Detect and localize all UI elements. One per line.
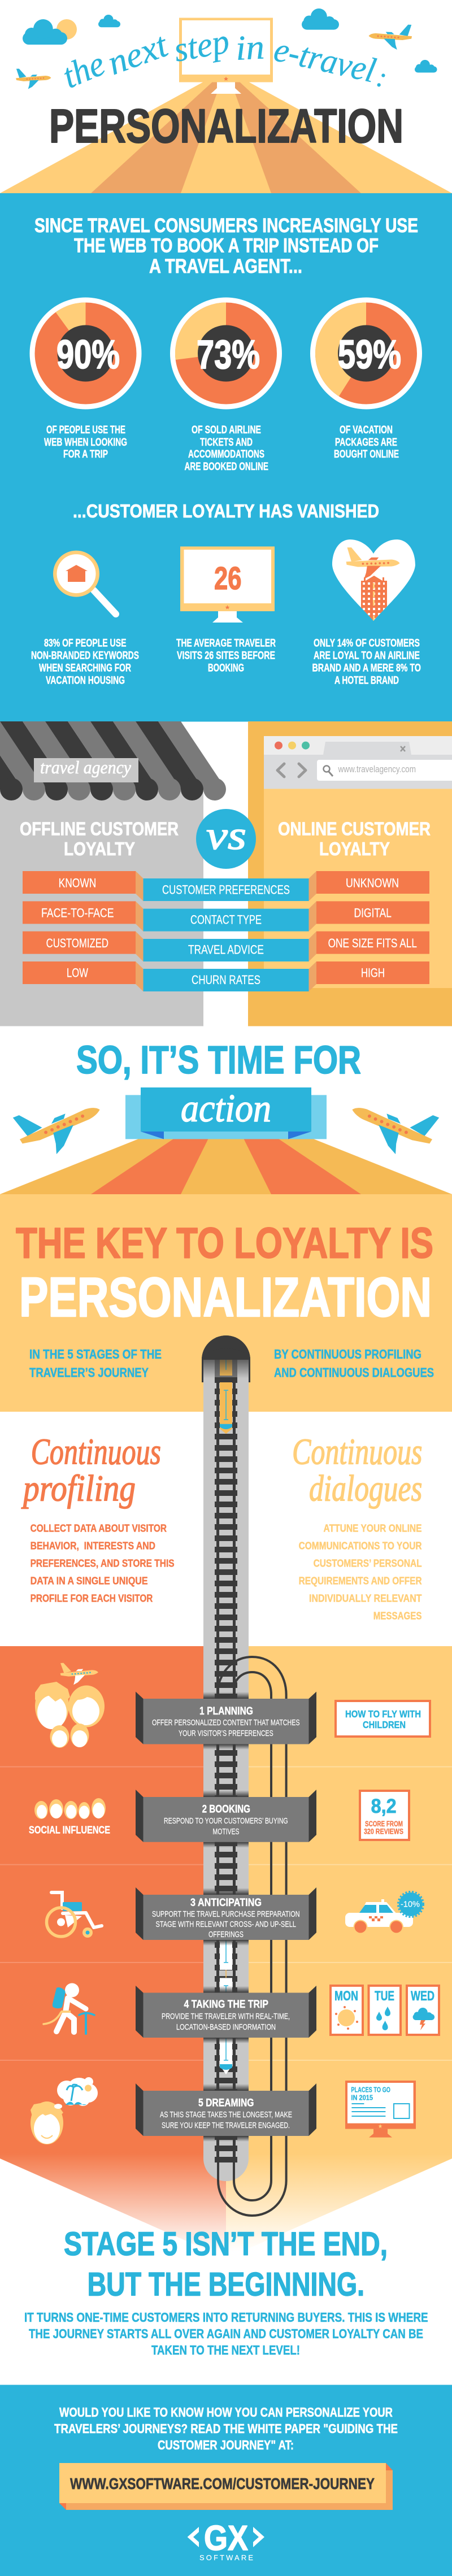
caption: 73% — [184, 424, 268, 473]
caption: keywords: 83% OF PEOPLE USE — [44, 638, 127, 650]
icon: dreaming head with thought bubble — [31, 2077, 98, 2144]
stage 1: planning: YOUR VISITOR’S PREFERENCES — [179, 1729, 273, 1738]
title: script line — [57, 22, 390, 96]
stage 3: anticipating: STAGE WITH RELEVANT CROSS- AND UP-SELL — [156, 1920, 296, 1929]
stage 2: booking: MOTIVES — [212, 1827, 240, 1837]
caption: keywords: VACATION HOUSING — [46, 675, 125, 686]
address bar: www.travelagency.com — [338, 764, 416, 774]
card: review score — [360, 1791, 409, 1840]
panel: offline store — [0, 721, 226, 1026]
panel: continuous dialogues — [292, 1431, 423, 1622]
text: five stages — [29, 1347, 162, 1380]
text: collect data: PREFERENCES, AND STORE THIS — [31, 1557, 175, 1569]
panel: time for action — [0, 1038, 452, 1194]
icon: right plane — [368, 23, 412, 50]
text: collect data — [31, 1522, 175, 1604]
panel: statistics on blue — [0, 193, 452, 722]
chart: 90% donut: 90% — [56, 333, 120, 377]
row: customer preferences: UNKNOWN — [346, 876, 399, 890]
row: travel advice — [23, 932, 429, 961]
heading: continuous dialogues: dialogues — [309, 1468, 423, 1509]
label: social influence: SOCIAL INFLUENCE — [29, 1825, 110, 1836]
chart: 73% donut — [170, 297, 282, 409]
row: customer preferences — [23, 871, 429, 901]
stage 3: anticipating: 3 ANTICIPATING — [190, 1897, 262, 1909]
heading: so it's time for: SO, IT’S TIME FOR — [76, 1038, 361, 1082]
text: collect data: BEHAVIOR, INTERESTS AND — [31, 1540, 155, 1552]
caption: 26 sites — [176, 638, 276, 675]
caption: 59%: BOUGHT ONLINE — [334, 449, 399, 460]
icon: left plane — [16, 68, 51, 89]
icon: monitor places to go: IN 2015 — [351, 2094, 373, 2101]
caption: keywords — [31, 638, 139, 686]
panel: continuous profiling — [21, 1431, 175, 1604]
tunnel entrance — [202, 1335, 250, 1382]
heading: offline customer loyalty — [20, 819, 179, 860]
ribbon: action: action — [181, 1087, 271, 1130]
icon: sun behind cloud — [56, 19, 77, 40]
card: how to fly with children — [336, 1701, 430, 1737]
heading: online customer loyalty — [278, 819, 431, 860]
ribbon: action — [125, 1087, 327, 1139]
heading: online customer loyalty: LOYALTY — [319, 839, 390, 860]
panel: online browser — [248, 721, 452, 1026]
text: collect data: COLLECT DATA ABOUT VISITOR — [31, 1522, 167, 1534]
panel: key to loyalty — [0, 1194, 452, 1412]
icon: social influence faces — [34, 1798, 106, 1819]
icon: monitor places to go — [345, 2081, 416, 2138]
caption: 59% — [334, 424, 399, 460]
heading: since travel consumers — [34, 215, 418, 277]
panel: page hero — [0, 8, 452, 193]
icon: right plane — [343, 1086, 441, 1165]
card: monday sunny — [331, 1986, 363, 2035]
light rays from monitor — [0, 82, 452, 193]
text: returning buyers — [24, 2310, 428, 2357]
sign: travel agency: travel agency — [40, 757, 132, 777]
badge: minus 10 percent: -10% — [401, 1900, 420, 1909]
text: five stages: IN THE 5 STAGES OF THE — [29, 1347, 162, 1361]
stage 3: anticipating: OFFERINGS — [208, 1930, 244, 1939]
icon: browser window controls — [275, 742, 411, 777]
heading: continuous profiling: profiling — [21, 1468, 136, 1509]
text: five stages: TRAVELER’S JOURNEY — [29, 1365, 149, 1380]
callout: url box: WWW.GXSOFTWARE.COM/CUSTOMER-JOURNEY — [70, 2475, 375, 2492]
caption: 73%: ACCOMMODATIONS — [188, 449, 264, 460]
card: review score: 8,2 — [371, 1795, 397, 1817]
caption: 26 sites: VISITS 26 SITES BEFORE — [177, 650, 275, 662]
icon: hiker — [44, 1983, 94, 2034]
text: continuous profiling and dialogues — [274, 1347, 434, 1380]
stage 1: planning — [136, 1691, 316, 1750]
row: contact type — [23, 901, 429, 932]
text: attune communications: MESSAGES — [373, 1610, 421, 1622]
row: travel advice: TRAVEL ADVICE — [188, 943, 264, 957]
light rays under ribbon — [0, 1132, 452, 1194]
heading: offline customer loyalty: OFFLINE CUSTOMER — [20, 819, 179, 840]
row: contact type: FACE-TO-FACE — [41, 906, 114, 920]
caption: 90% — [44, 424, 127, 460]
caption: 90%: FOR A TRIP — [63, 449, 108, 460]
caption: brand loyalty — [312, 638, 421, 686]
title: script line: : — [373, 60, 390, 94]
badge: vs: vs — [206, 813, 246, 858]
text: white paper invitation — [54, 2405, 398, 2452]
heading: customer loyalty has vanished: ...CUSTOMER LOYALTY HAS VANISHED — [73, 501, 379, 521]
card: monday sunny: MON — [334, 1988, 358, 2004]
stage 2: booking: RESPOND TO YOUR CUSTOMERS’ BUYING — [164, 1816, 288, 1826]
stage 4: taking the trip — [136, 1986, 316, 2043]
icon: striped awning — [0, 721, 226, 800]
heading: continuous profiling — [21, 1431, 161, 1509]
title: script line: next — [103, 25, 173, 82]
heading: stage 5 isn't the end: STAGE 5 ISN’T THE END, — [64, 2226, 388, 2262]
stage 5: dreaming: AS THIS STAGE TAKES THE LONGEST, MAKE — [160, 2110, 292, 2120]
text: attune communications: CUSTOMERS’ PERSONAL — [314, 1557, 422, 1569]
row: churn rates: CHURN RATES — [192, 973, 260, 987]
icon: heart with plane and hotel — [332, 539, 415, 621]
caption: 73%: ARE BOOKED ONLINE — [184, 461, 268, 473]
text: white paper invitation: CUSTOMER JOURNEY" AT: — [158, 2438, 294, 2452]
train: yellow — [220, 1353, 232, 1434]
stage 3: anticipating: SUPPORT THE TRAVEL PURCHASE PREPARATION — [152, 1909, 300, 1919]
train: white — [220, 1940, 232, 2074]
caption: 73%: OF SOLD AIRLINE — [192, 424, 261, 436]
caption: keywords: WHEN SEARCHING FOR — [39, 663, 131, 675]
chart: 59% donut — [310, 297, 422, 409]
heading: since travel consumers: THE WEB TO BOOK A TRIP INSTEAD OF — [74, 235, 379, 256]
caption: 90%: OF PEOPLE USE THE — [46, 424, 125, 436]
stage 5: dreaming: 5 DREAMING — [198, 2098, 254, 2109]
row: churn rates: LOW — [67, 966, 89, 980]
heading: continuous dialogues — [292, 1431, 423, 1509]
caption: keywords: NON-BRANDED KEYWORDS — [31, 650, 139, 662]
row: contact type: CONTACT TYPE — [190, 913, 262, 927]
panel: offline versus online — [0, 721, 452, 1026]
panel: footer call to action — [0, 2385, 452, 2576]
heading: since travel consumers: A TRAVEL AGENT... — [149, 255, 302, 277]
panel: journey stages background — [0, 1646, 452, 2259]
card: review score: SCORE FROM — [365, 1820, 403, 1828]
row: travel advice: ONE SIZE FITS ALL — [328, 936, 417, 950]
callout: url box — [59, 2463, 393, 2510]
icon: monitor with 26 — [180, 546, 275, 623]
heading: offline customer loyalty: LOYALTY — [64, 839, 135, 860]
chart: 73% donut: 73% — [197, 333, 260, 377]
stage 1: planning: 1 PLANNING — [199, 1705, 253, 1717]
icon: desktop monitor — [179, 18, 273, 94]
icon: left plane — [11, 1086, 109, 1165]
row: churn rates: HIGH — [361, 966, 385, 980]
stage 5: dreaming: SURE YOU KEEP THE TRAVELER ENGAGED. — [162, 2121, 290, 2130]
railway track — [202, 1335, 286, 2216]
address bar — [317, 760, 452, 781]
caption: 59%: OF VACATION — [340, 424, 393, 436]
stage 3: anticipating — [136, 1887, 316, 1946]
text: continuous profiling and dialogues: BY CONTINUOUS PROFILING — [274, 1347, 421, 1361]
stage 2: booking: 2 BOOKING — [202, 1804, 250, 1816]
stage 2: booking — [136, 1790, 316, 1848]
text: collect data: DATA IN A SINGLE UNIQUE — [31, 1575, 148, 1587]
heading: stage 5 isn't the end — [64, 2226, 388, 2303]
chart: 59% donut: 59% — [338, 333, 401, 377]
title: script line: in — [234, 28, 266, 68]
card: wednesday storm — [407, 1986, 439, 2035]
icon: clouds — [23, 8, 437, 73]
caption: brand loyalty: ARE LOYAL TO AN AIRLINE — [314, 650, 420, 662]
card: tuesday rain — [368, 1986, 401, 2035]
caption: 90%: WEB WHEN LOOKING — [44, 437, 127, 449]
caption: brand loyalty: ONLY 14% OF CUSTOMERS — [314, 638, 420, 650]
stage 4: taking the trip: LOCATION-BASED INFORMATION — [176, 2022, 276, 2032]
icon: monitor places to go: PLACES TO GO — [351, 2086, 390, 2094]
badge: vs — [196, 809, 256, 869]
card: how to fly with children: HOW TO FLY WITH — [345, 1708, 421, 1720]
text: returning buyers: TAKEN TO THE NEXT LEVEL! — [151, 2343, 300, 2357]
card: review score: 320 REVIEWS — [364, 1827, 403, 1835]
logo: gx software — [188, 2519, 264, 2562]
icon: family with plane — [35, 1661, 105, 1748]
icon: magnifying glass with house — [53, 551, 116, 614]
caption: 59%: PACKAGES ARE — [335, 437, 397, 449]
stage 4: taking the trip: 4 TAKING THE TRIP — [184, 1999, 268, 2011]
logo: gx software: SOFTWARE — [199, 2553, 253, 2562]
title: script line: step — [171, 22, 232, 69]
heading: stage 5 isn't the end: BUT THE BEGINNING. — [88, 2266, 364, 2303]
card: tuesday rain: TUE — [375, 1988, 394, 2004]
card: how to fly with children: CHILDREN — [363, 1719, 406, 1730]
stage 5: dreaming — [136, 2083, 316, 2142]
row: contact type: DIGITAL — [354, 906, 392, 920]
title: script line: e-travel — [271, 30, 379, 90]
icon: monitor with 26: 26 — [214, 560, 242, 597]
stage 1: planning: OFFER PERSONALIZED CONTENT THAT MATCHES — [152, 1718, 300, 1728]
row: churn rates — [23, 961, 429, 991]
icon: taxi with discount badge — [345, 1891, 424, 1934]
title: script line: the — [57, 44, 111, 96]
text: collect data: PROFILE FOR EACH VISITOR — [31, 1592, 153, 1604]
text: attune communications — [299, 1522, 422, 1622]
logo: gx software: GX — [204, 2519, 248, 2558]
caption: 73%: TICKETS AND — [200, 437, 253, 449]
icon: wheelchair — [46, 1892, 102, 1938]
caption: 26 sites: BOOKING — [208, 663, 244, 675]
row: travel advice: CUSTOMIZED — [46, 936, 108, 950]
text: attune communications: COMMUNICATIONS TO YOUR — [299, 1540, 422, 1552]
row: customer preferences: CUSTOMER PREFERENCES — [162, 882, 290, 897]
caption: 26 sites: THE AVERAGE TRAVELER — [176, 638, 276, 650]
row: customer preferences: KNOWN — [59, 876, 96, 890]
caption: brand loyalty: A HOTEL BRAND — [334, 675, 399, 686]
heading: continuous profiling: Continuous — [31, 1431, 161, 1473]
card: wednesday storm: WED — [411, 1988, 434, 2004]
text: attune communications: REQUIREMENTS AND OFFER — [299, 1575, 422, 1587]
stage 4: taking the trip: PROVIDE THE TRAVELER WITH REAL-TIME, — [162, 2012, 290, 2021]
text: attune communications: ATTUNE YOUR ONLINE — [323, 1522, 421, 1534]
chart: 90% donut — [29, 297, 141, 409]
text: attune communications: INDIVIDUALLY RELEVANT — [309, 1592, 422, 1604]
